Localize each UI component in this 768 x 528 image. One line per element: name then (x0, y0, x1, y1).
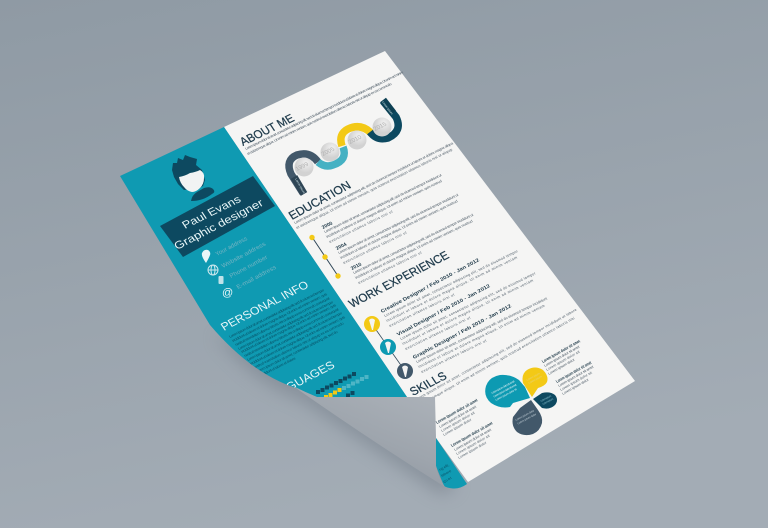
personal info text: nostrud exercitation ullamco laboris nisi ut aliquip ex ea commodo consequat. (234, 296, 331, 347)
phone number: Phone number (229, 255, 269, 280)
name band (160, 176, 275, 257)
year discs: 2010 (348, 135, 364, 146)
panel: white page (224, 51, 635, 482)
work entry: creative designer: exercitation ullamco laboris nisi ut (388, 293, 455, 328)
personal info text: incididunt ut labore et dolore magna aliqua. Ut enim ad minim veniam, quis (231, 292, 328, 343)
education entry 2004: exercitation ullamco laboris nisi ut (342, 231, 408, 265)
year discs: 1999 (295, 162, 311, 173)
petal: dark teal (533, 392, 557, 409)
petal labels: Lorem ipsum (525, 371, 541, 382)
personal info text: Lorem ipsum dolor sit amet, consectetur adipiscing elit, sed do eiusmod tempor (237, 300, 335, 351)
education entry 2010: incididunt ut labore et dolore magna aliqua. Ut enim ad minim veniam, quis nostrud (354, 219, 474, 280)
job title: Graphic designer (172, 197, 266, 252)
work entry: creative designer: Creative Designer / Feb 2010 - Jan 2012 (380, 257, 481, 315)
petal: slate (512, 400, 542, 435)
education entry 2004: 2004 (335, 242, 348, 252)
skill note: left upper: Lorem ipsum dolor sit (440, 411, 476, 433)
petal labels: Lorem ipsum dolor (516, 412, 537, 425)
petal labels: Lorem ipsum (539, 394, 553, 403)
personal info text: incididunt ut labore et dolore magna aliqua. Ut enim ad minim veniam, quis (249, 315, 346, 366)
petal labels: Lorem ipsum dolor (514, 409, 535, 422)
petal labels (490, 371, 555, 425)
work entry: visual designer: Visual Designer / Feb 2010 - Jan 2012 (396, 283, 492, 338)
work entry: visual designer: Lorem ipsum dolor sit amet, consectetur adipiscing elit, sed do eiusmod tempor (399, 271, 537, 341)
education entry 2000: 2000 (321, 221, 334, 231)
heading: languages: LANGUAGES (263, 359, 338, 404)
education intro text: et doloremque aliqua. Ut enim ad minim veniam, quis nostrud exercitation ullamco laboris nisi ut aliquip (295, 148, 453, 230)
personal info text (228, 288, 346, 378)
education intro text: Lorem ipsum dolor sit amet, consectetur adipiscing elit, sed do eiusmod tempor incididunt ut labore et dolore magna aliqua (293, 141, 455, 225)
heading: about me: ABOUT ME (237, 111, 297, 148)
education entry 2000: Lorem ipsum dolor sit amet, consectetur adipiscing elit, sed do eiusmod tempor incididunt ut (323, 173, 443, 234)
icon: avatar (172, 155, 214, 201)
skill note: right: Lorem ipsum dolor (561, 377, 590, 396)
shoulders (191, 187, 214, 201)
paper shadow (215, 335, 455, 495)
skill note: top right (541, 338, 581, 376)
hair (172, 155, 205, 190)
skill note: right: Lorem ipsum dolor sit amet (555, 360, 593, 384)
name: Paul Evans (180, 194, 244, 231)
work entry: graphic designer: exercitation ullamco laboris nisi ut (420, 339, 487, 374)
curled corner: remainder text: labore (440, 469, 452, 478)
address: Your address (215, 236, 249, 258)
education entry 2004: incididunt ut labore et dolore magna aliqua. Ut enim ad minim veniam, quis nostrud (339, 199, 459, 260)
skill note: left lower: Lorem ipsum dolor sit amet (450, 420, 494, 448)
year discs: 2015 (373, 122, 389, 133)
education entry 2010: Lorem ipsum dolor sit amet, consectetur adipiscing elit, sed do eiusmod tempor incididunt ut (352, 213, 474, 275)
heading: personal info: PERSONAL INFO (219, 279, 311, 333)
skill note: left lower: Lorem ipsum dolor (457, 440, 488, 460)
work entry: creative designer: Lorem ipsum dolor sit amet, consectetur adipiscing elit, sed do eiusmod tempor (383, 249, 519, 318)
skill note: right (555, 360, 594, 396)
education entry 2010: 2010 (350, 262, 363, 272)
icon: pin (202, 250, 210, 263)
year discs (294, 118, 392, 176)
skill note: left upper: Lorem ipsum dolor sit amet (435, 397, 479, 425)
skill note: right: Lorem ipsum dolor sit amet (557, 365, 594, 388)
about me text: et doloremque aliqua. Ut enim ad minim veniam, quis nostrud exercitation ullamco laboris nisi ut aliquip ex ea commodo (246, 82, 393, 156)
timeline: work icons (364, 316, 413, 379)
main column content (237, 71, 594, 460)
skill note: left lower: Lorem ipsum dolor sit amet (453, 428, 492, 452)
curled corner: remainder text (438, 463, 453, 484)
curled corner: back of the page (293, 386, 445, 487)
heading: education: EDUCATION (286, 178, 353, 222)
panel: teal sidebar (120, 127, 407, 397)
ribbon: slate (289, 154, 318, 193)
skills intro text: et doloremque aliqua. Ut enim ad minim veniam, quis nostrud exercitation ullamco laboris nisi (418, 316, 576, 407)
work entry: creative designer: incididunt ut labore et dolore magna aliqua. Ut enim ad minim veniam (385, 256, 518, 323)
curled corner: remainder text: quat (442, 476, 453, 484)
skills intro text: Lorem ipsum dolor sit amet, consectetur adipiscing elit, sed do eiusmod tempor incididunt ut labore (414, 308, 578, 402)
curled corner: remainder text: ng elit, (438, 463, 450, 472)
work entry: visual designer: incididunt ut labore et dolore magna aliqua. Ut enim ad minim veniam (401, 279, 534, 346)
year discs: 2005 (321, 147, 337, 158)
website: Website address (221, 242, 267, 270)
work entry: visual designer: exercitation ullamco laboris nisi ut (404, 316, 471, 351)
personal info text: Lorem ipsum dolor sit amet, consectetur adipiscing elit, sed do eiusmod tempor (228, 288, 326, 339)
icon: phone (218, 276, 224, 284)
personal info text: nostrud exercitation ullamco laboris nisi ut aliquip ex ea commodo (252, 322, 345, 370)
personal info text: incididunt ut labore et dolore (258, 357, 297, 378)
skill note: right: Lorem ipsum dolor sit (559, 371, 593, 392)
personal info text: Lorem ipsum dolor sit amet, consectetur adipiscing elit, sed do eiusmod tempor (246, 311, 344, 362)
personal info text: nostrud exercitation ullamco laboris nisi ut aliquip ex ea commodo consequat. (243, 307, 340, 358)
skill note: left upper (435, 397, 479, 437)
chart: timeline ribbon (289, 100, 398, 195)
ribbon: yellow (341, 127, 371, 146)
sidebar content (160, 155, 368, 404)
ribbon: teal (318, 147, 344, 166)
timeline: education (309, 235, 341, 279)
heading: work experience: WORK EXPERIENCE (346, 248, 452, 310)
ribbon tag: right: Lorem ipsum (381, 100, 394, 116)
work entry: graphic designer: incididunt ut labore et dolore magna aliqua. Ut enim ad minim veniam (417, 304, 546, 369)
skill note: left upper: Lorem ipsum dolor (442, 417, 473, 437)
heading: skills: SKILLS (407, 369, 449, 398)
about me text: Lorem ipsum dolor sit amet, consectetur adipiscing elit, sed do eiusmod tempor incididunt ut labore et dolore magna aliqua. Ut enim ad minim (244, 71, 404, 151)
ribbon: dark teal (370, 101, 398, 139)
petal labels: Lorem ipsum dolor sit amet (492, 383, 518, 398)
skill note: left upper: Lorem ipsum dolor sit amet (438, 405, 477, 429)
education entry 2010: exercitation ullamco laboris nisi ut (357, 251, 423, 285)
work entry: graphic designer: Lorem ipsum dolor sit amet, consectetur adipiscing elit, sed do eiusmod tempor incididunt (415, 297, 548, 364)
skill note: top right: Lorem ipsum dolor sit (545, 350, 581, 372)
personal info text: incididunt ut labore et dolore magna aliqua. Ut enim ad minim veniam, quis (240, 303, 337, 354)
education entry 2004: Lorem ipsum dolor sit amet, consectetur adipiscing elit, sed do eiusmod tempor incididunt ut (337, 193, 459, 255)
skill note: top right: Lorem ipsum dolor sit amet (543, 345, 580, 368)
education entry 2000: incididunt ut labore et dolore magna aliqua. Ut enim ad minim veniam, quis nostrud (325, 179, 443, 239)
education entry 2000: exercitation ullamco laboris nisi ut (328, 210, 394, 244)
chart: skills petals (485, 368, 557, 435)
petal: yellow (522, 368, 548, 397)
petal labels: Lorem ipsum dolor sit amet (490, 379, 516, 395)
skill note: top right: Lorem ipsum dolor sit amet (541, 338, 581, 364)
petal labels: Lorem ipsum (527, 374, 543, 385)
language skill squares (316, 372, 368, 399)
icon: at: @ (222, 287, 233, 299)
ribbon tag: left: Lorem ipsum (294, 177, 306, 195)
petal: teal (485, 375, 530, 408)
petal labels: Lorem ipsum dolor sit (494, 387, 518, 402)
work entry: graphic designer: Graphic Designer / Feb 2010 - Jan 2012 (412, 303, 513, 361)
face (179, 170, 204, 192)
email: E-mail address (236, 265, 278, 291)
skill note: left lower: Lorem ipsum dolor sit (455, 434, 491, 456)
petal labels: Lorem ipsum (541, 397, 555, 406)
skill note: left lower (450, 420, 494, 460)
contact list (202, 236, 278, 299)
personal info text: Lorem ipsum dolor sit amet, consectetur adipiscing elit, sed do (255, 330, 339, 374)
curled corner: teal remainder (436, 438, 467, 489)
icon: globe (208, 265, 218, 275)
skill note: top right: Lorem ipsum dolor (547, 357, 576, 376)
